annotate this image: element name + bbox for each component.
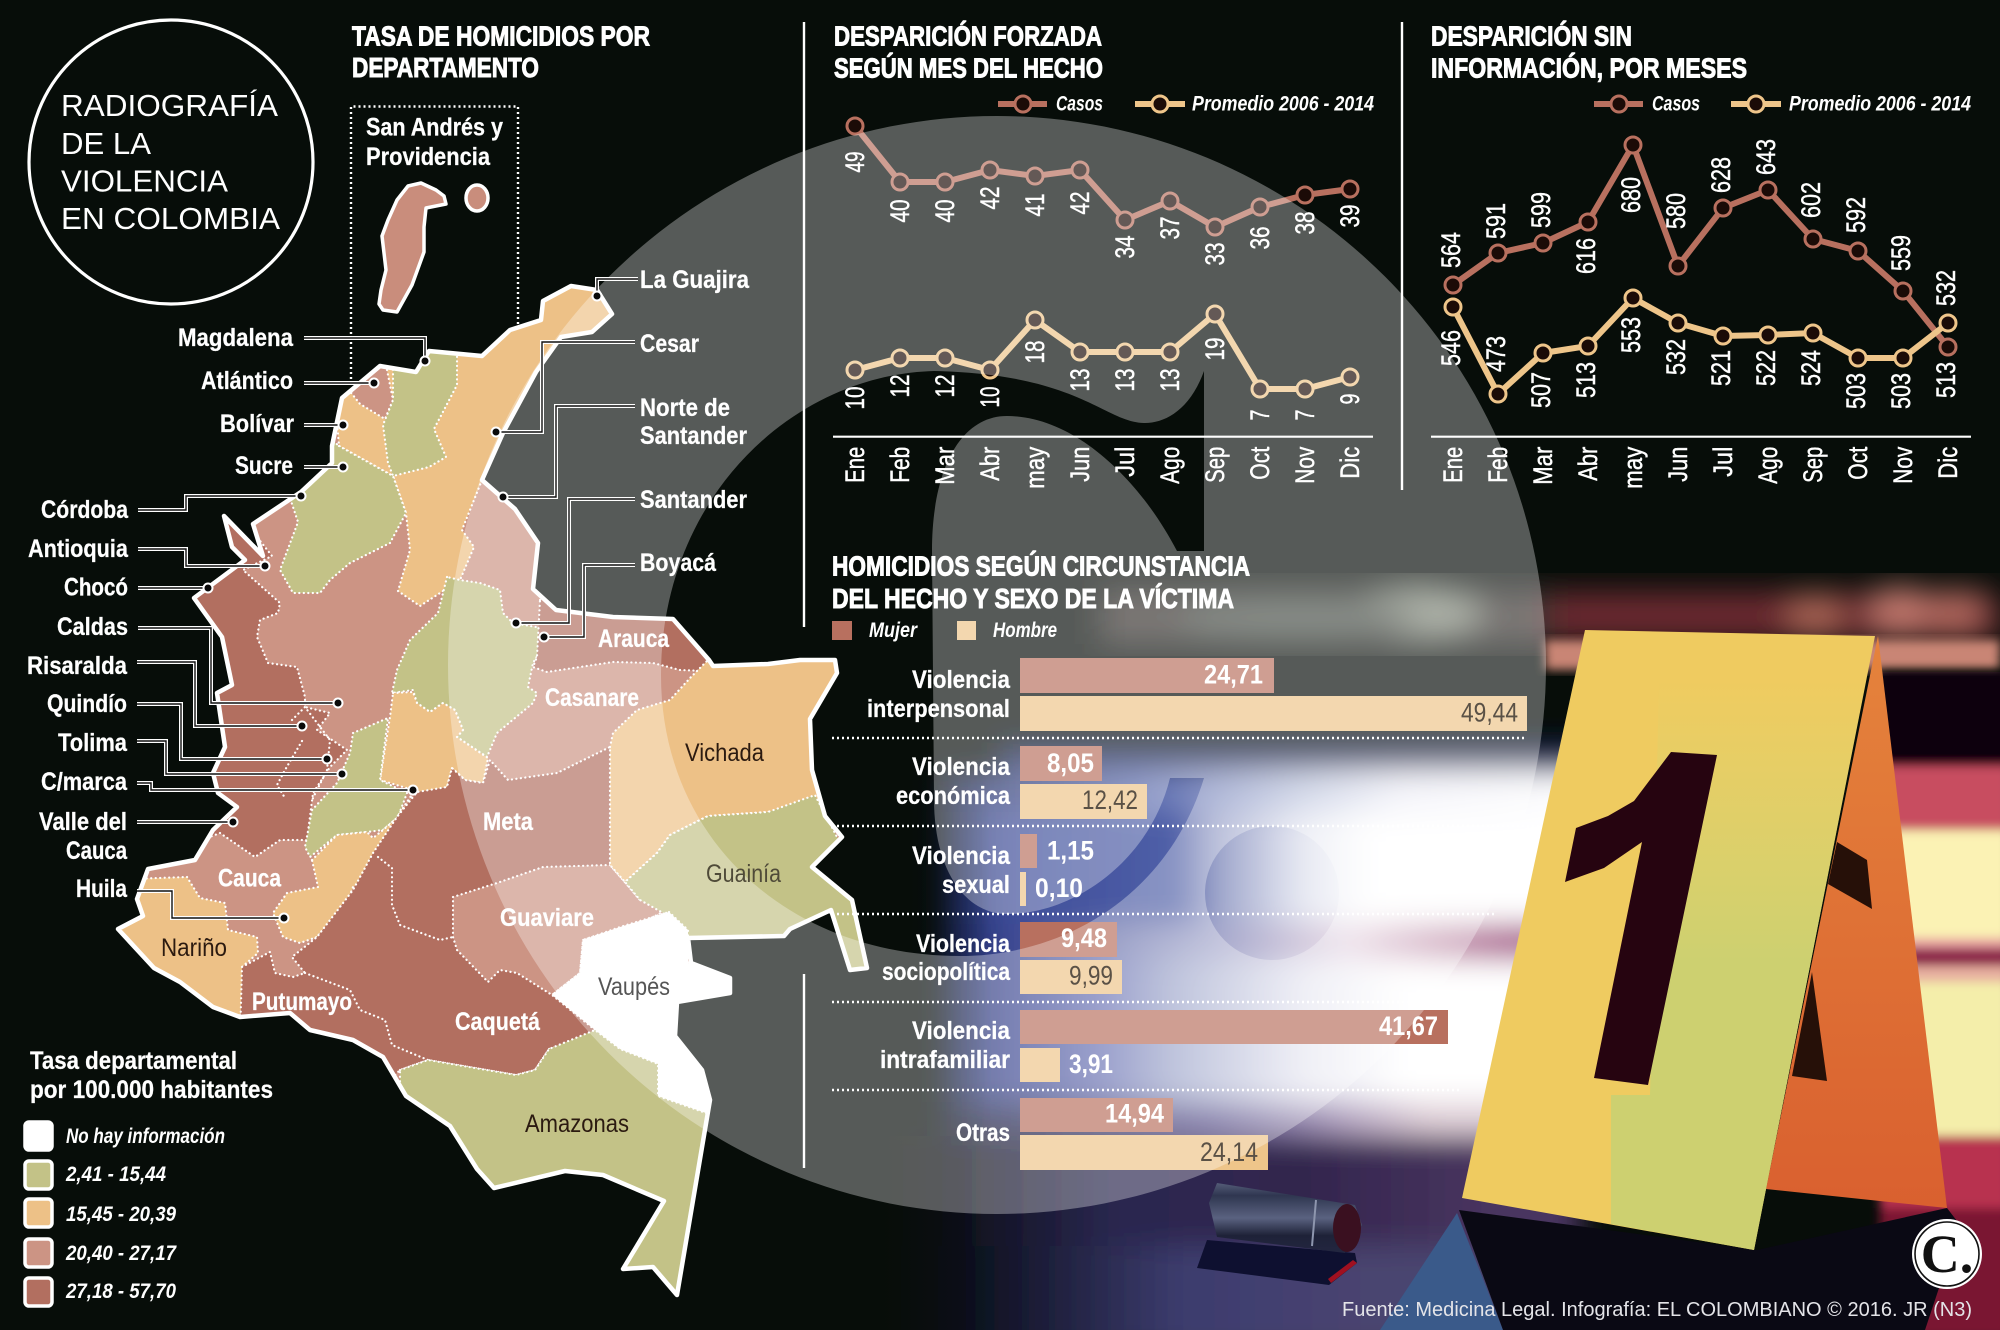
department labels with leaders: Huila	[76, 875, 128, 903]
Providencia island	[466, 185, 488, 211]
casos markers	[847, 118, 1358, 235]
title circle	[29, 20, 313, 304]
promedio values: 18	[1020, 340, 1050, 364]
map legend: 15,45 - 20,39	[66, 1203, 176, 1226]
marker shadow	[1459, 1208, 1960, 1330]
bullet casing	[1197, 1183, 1362, 1285]
month labels: Dic	[1933, 447, 1963, 479]
casos values	[840, 152, 1365, 266]
bar values: 9,48	[1061, 923, 1107, 953]
map of Colombia: departments	[121, 288, 864, 1290]
month labels: Ene	[840, 447, 870, 483]
Vichada	[610, 650, 850, 882]
map legend: No hay información	[66, 1125, 225, 1148]
promedio values: 522	[1751, 350, 1781, 386]
Choco and Valle	[197, 524, 348, 858]
forced disappearance chart text	[833, 21, 1374, 489]
category labels: Violencia	[916, 930, 1011, 958]
Vaupes	[552, 912, 735, 1118]
Cundinamarca	[380, 692, 488, 795]
legend labels: Mujer	[869, 619, 919, 642]
heading: tasa de homicidios	[352, 20, 650, 83]
homicide chart text	[832, 550, 1540, 1167]
labels on the map: Vichada	[685, 739, 764, 767]
month labels: Mar	[930, 447, 960, 485]
casing shadow	[1197, 1240, 1357, 1285]
promedio values: 503	[1886, 373, 1916, 409]
promedio values: 13	[1110, 368, 1140, 392]
casos markers	[1445, 137, 1956, 355]
department labels with leaders: Cesar	[640, 330, 699, 358]
violencia sociopolitica	[1020, 922, 1117, 957]
bar values: 9,99	[1069, 960, 1113, 990]
San Andres label: Providencia	[366, 143, 491, 171]
line chart: desaparicion forzada	[847, 118, 1358, 397]
Tolima	[305, 718, 407, 857]
department labels with leaders: Magdalena	[178, 324, 294, 352]
promedio markers	[847, 306, 1358, 397]
promedio line	[1453, 298, 1948, 394]
newspaper logo: C.	[1921, 1224, 1973, 1284]
promedio values: 7	[1245, 410, 1275, 420]
labels on the map: Putumayo	[252, 988, 352, 1016]
far right background stripes	[1880, 672, 2000, 1330]
promedio values: 532	[1661, 339, 1691, 375]
bar values: 14,94	[1105, 1099, 1164, 1129]
promedio values	[840, 338, 1365, 420]
department labels with leaders: Sucre	[235, 452, 293, 480]
vertical dividers	[804, 22, 1402, 1168]
no-information disappearance chart text	[1431, 21, 1971, 489]
heading: DESPARICIÓN SIN	[1431, 21, 1632, 52]
map legend: 20,40 - 27,17	[65, 1242, 177, 1265]
month labels: Mar	[1528, 447, 1558, 485]
casos values: 38	[1290, 212, 1320, 234]
San Andres dotted box	[351, 106, 518, 379]
casos values: 42	[975, 186, 1005, 210]
promedio values: 19	[1200, 338, 1230, 360]
promedio values: 12	[885, 374, 915, 398]
month labels: Abr	[975, 447, 1005, 481]
Guainia	[625, 794, 864, 968]
bar values: 24,71	[1204, 660, 1263, 690]
left fade	[780, 520, 990, 1330]
north orange departments	[337, 288, 610, 607]
leader lines	[137, 279, 638, 922]
forced disappearance chart text: Casos	[1056, 93, 1103, 116]
heading: tasa de homicidios: TASA DE HOMICIDIOS POR	[352, 20, 650, 52]
category labels: económica	[896, 782, 1011, 810]
month labels: Jul	[1708, 447, 1738, 477]
category labels: Otras	[956, 1119, 1010, 1147]
month labels	[840, 446, 1365, 489]
bar values: 24,14	[1200, 1137, 1258, 1167]
category labels: Violencia	[912, 666, 1011, 694]
promedio values: 12	[930, 374, 960, 398]
promedio line	[855, 314, 1350, 389]
promedio values: 13	[1065, 368, 1095, 392]
department labels with leaders: Tolima	[58, 729, 128, 757]
Huila	[273, 793, 413, 943]
department labels with leaders: Córdoba	[41, 496, 129, 524]
department labels with leaders: La Guajira	[640, 266, 750, 294]
marker back number	[1828, 842, 1872, 909]
legend	[998, 96, 1185, 112]
labels on the map: Meta	[483, 808, 534, 836]
otras	[1020, 1098, 1173, 1132]
month labels: Dic	[1335, 447, 1365, 479]
bar values: 8,05	[1047, 748, 1094, 778]
casos values: 580	[1661, 193, 1691, 229]
promedio values: 9	[1335, 394, 1365, 404]
month labels	[1438, 446, 1963, 489]
department labels with leaders: Bolívar	[220, 410, 294, 438]
category labels: Violencia	[912, 1017, 1011, 1045]
photo colour bands	[860, 745, 1640, 1330]
month labels: Oct	[1843, 446, 1873, 480]
promedio values: 7	[1290, 410, 1320, 420]
casos values: 42	[1065, 192, 1095, 214]
promedio values: 507	[1526, 372, 1556, 408]
axis	[833, 436, 1373, 438]
no-information disappearance chart text: Casos	[1652, 93, 1700, 116]
bar values: 3,91	[1069, 1049, 1113, 1079]
category labels: interpensonal	[867, 695, 1010, 723]
department labels with leaders: Risaralda	[27, 652, 128, 680]
casos values: 628	[1706, 157, 1736, 193]
heading: DESPARICIÓN FORZADA	[834, 21, 1102, 52]
number one	[1565, 752, 1717, 1085]
casos values: 33	[1200, 242, 1230, 266]
El Colombiano logo disk watermark	[448, 116, 1546, 1214]
inner dotted boundaries	[378, 857, 453, 940]
casos values: 513	[1931, 362, 1961, 398]
month labels: may	[1020, 446, 1050, 489]
labels on the map: Guaviare	[500, 904, 594, 932]
promedio values: 546	[1436, 330, 1466, 366]
casos line	[1453, 145, 1948, 347]
month labels: Ene	[1438, 447, 1468, 483]
bars: homicide by circumstance	[832, 621, 1527, 1170]
Atlantico	[350, 368, 393, 419]
Risaralda dotted pockets	[292, 707, 330, 800]
promedio values: 532	[1931, 270, 1961, 306]
title circle: VIOLENCIA	[61, 164, 228, 198]
crime scene photo	[780, 520, 2000, 1330]
casos values: 34	[1110, 236, 1140, 258]
distant lights	[1100, 585, 2000, 644]
bar values: 12,42	[1082, 785, 1138, 815]
San Andres islands	[379, 183, 488, 312]
category labels	[867, 666, 1011, 1147]
map legend: 27,18 - 57,70	[65, 1280, 176, 1303]
month labels: Ago	[1155, 447, 1185, 484]
violencia economica	[1020, 746, 1102, 781]
department labels with leaders: Chocó	[64, 574, 128, 602]
department labels with leaders: Atlántico	[201, 367, 293, 395]
casos values: 616	[1571, 238, 1601, 274]
marker front	[1462, 630, 1875, 1250]
casos values: 39	[1335, 204, 1365, 228]
month labels: Feb	[885, 447, 915, 483]
labels on the map: Guainía	[706, 860, 781, 888]
Guaviare	[453, 865, 673, 995]
category labels: intrafamiliar	[880, 1046, 1010, 1074]
casos values: 559	[1886, 235, 1916, 271]
month labels: Ago	[1753, 447, 1783, 484]
department labels with leaders: C/marca	[41, 768, 128, 796]
casos line	[855, 126, 1350, 227]
promedio values: 10	[840, 386, 870, 410]
dotted separators	[832, 738, 1540, 1090]
department labels with leaders: Quindío	[47, 690, 127, 718]
casos values: 643	[1751, 139, 1781, 175]
violencia interpersonal	[1020, 658, 1274, 693]
heading: HOMICIDIOS SEGÚN CIRCUNSTANCIA	[832, 550, 1250, 582]
legend	[1594, 96, 1781, 112]
Amazonas	[398, 1030, 706, 1290]
title circle: EN COLOMBIA	[61, 201, 280, 236]
map legend	[25, 1047, 273, 1306]
salmon band	[1545, 640, 2000, 670]
casos values	[1436, 139, 1961, 398]
promedio values: 503	[1841, 373, 1871, 409]
forced disappearance chart text: SEGÚN MES DEL HECHO	[834, 52, 1103, 83]
labels on the map: Arauca	[598, 625, 670, 653]
casos values: 592	[1841, 197, 1871, 233]
labels on the map: Casanare	[545, 684, 639, 712]
category labels: Violencia	[912, 753, 1011, 781]
department labels with leaders: Cauca	[66, 837, 128, 865]
map outline	[118, 286, 867, 1295]
title circle: DE LA	[61, 126, 151, 161]
San Andres island	[379, 183, 446, 312]
promedio values: 473	[1481, 336, 1511, 372]
map legend: Tasa departamental	[30, 1047, 237, 1075]
bar values: 49,44	[1461, 698, 1518, 728]
promedio values: 521	[1706, 350, 1736, 386]
promedio values: 524	[1796, 350, 1826, 386]
month labels: Sep	[1200, 447, 1230, 483]
evidence marker	[1462, 630, 1947, 1250]
casos values: 564	[1436, 232, 1466, 268]
labels on the map	[161, 625, 781, 1138]
labels on the map: Amazonas	[525, 1110, 629, 1138]
Narino	[121, 876, 259, 1015]
no-information disappearance chart text: INFORMACIÓN, POR MESES	[1431, 52, 1747, 83]
violencia intrafamiliar	[1020, 1010, 1448, 1044]
month labels: may	[1618, 446, 1648, 489]
month labels: Nov	[1888, 446, 1918, 484]
casos values: 680	[1616, 177, 1646, 213]
source credit: Fuente: Medicina Legal. Infografía: EL COLOMBIANO © 2016. JR (N3)	[1342, 1299, 1972, 1321]
department labels with leaders: Santander	[640, 422, 747, 450]
labels on the map: Vaupés	[598, 973, 670, 1001]
category labels: sociopolítica	[882, 958, 1011, 986]
month labels: Sep	[1798, 447, 1828, 483]
San Andres label	[366, 114, 503, 171]
legend swatches	[832, 621, 852, 640]
casos values: 591	[1481, 203, 1511, 239]
department labels with leaders: Caldas	[57, 613, 128, 641]
promedio markers	[1445, 290, 1956, 402]
casos values: 41	[1020, 194, 1050, 216]
newspaper logo	[1912, 1219, 1982, 1289]
promedio values: 13	[1155, 368, 1185, 392]
Sucre Cordoba Antioquia green	[280, 440, 406, 593]
month labels: Abr	[1573, 447, 1603, 481]
Meta Caqueta Putumayo	[240, 747, 610, 1100]
category labels: Violencia	[912, 842, 1011, 870]
Boyaca	[392, 577, 553, 757]
map legend: por 100.000 habitantes	[30, 1076, 273, 1104]
category labels: sexual	[942, 871, 1010, 899]
labels on the map: Nariño	[161, 934, 227, 962]
casos values: 599	[1526, 192, 1556, 228]
casos values: 602	[1796, 182, 1826, 218]
no-information disappearance chart text: Promedio 2006 - 2014	[1789, 93, 1971, 116]
San Andres label: San Andrés y	[366, 114, 503, 142]
Arauca	[533, 600, 730, 672]
casing body	[1209, 1183, 1362, 1253]
title circle: RADIOGRAFÍA	[61, 88, 278, 123]
violencia sexual	[1020, 834, 1037, 868]
month labels: Jul	[1110, 447, 1140, 477]
heading: tasa de homicidios: DEPARTAMENTO	[352, 52, 539, 83]
forced disappearance chart text: Promedio 2006 - 2014	[1192, 93, 1374, 116]
casos values: 49	[840, 152, 870, 172]
department labels with leaders: Antioquia	[28, 535, 129, 563]
labels on the map: Cauca	[218, 864, 282, 892]
month labels: Nov	[1290, 446, 1320, 484]
line chart: desaparicion sin informacion	[1445, 137, 1956, 402]
labels on the map: Caquetá	[455, 1008, 540, 1036]
month labels: Jun	[1065, 447, 1095, 482]
department labels with leaders: Boyacá	[640, 549, 716, 577]
bar values	[1035, 660, 1518, 1167]
Magdalena	[383, 340, 457, 476]
month labels: Feb	[1483, 447, 1513, 483]
department labels with leaders: Santander	[640, 486, 747, 514]
promedio values: 553	[1616, 317, 1646, 353]
month labels: Jun	[1663, 447, 1693, 482]
month labels: Oct	[1245, 446, 1275, 480]
bar values: 1,15	[1047, 836, 1094, 866]
department labels with leaders: Valle del	[39, 808, 127, 836]
promedio values: 10	[975, 386, 1005, 408]
promedio values	[1436, 270, 1961, 409]
legend swatches	[25, 1122, 52, 1306]
casos values: 37	[1155, 216, 1185, 240]
department labels with leaders: Norte de	[640, 394, 730, 422]
casos values: 36	[1245, 226, 1275, 250]
department labels with leaders	[27, 266, 750, 903]
map legend: 2,41 - 15,44	[65, 1163, 166, 1186]
axis	[1431, 436, 1971, 438]
casos values: 40	[885, 200, 915, 222]
promedio values: 513	[1571, 362, 1601, 398]
bar values: 41,67	[1379, 1011, 1438, 1041]
casos values: 40	[930, 200, 960, 222]
homicide chart text: DEL HECHO Y SEXO DE LA VÍCTIMA	[832, 583, 1234, 614]
marker back side	[1766, 636, 1947, 1208]
leader end dots	[204, 292, 602, 922]
homicide chart text: Hombre	[993, 619, 1057, 642]
bar values: 0,10	[1035, 873, 1083, 903]
blue lit floor wedge	[1380, 1213, 1503, 1330]
